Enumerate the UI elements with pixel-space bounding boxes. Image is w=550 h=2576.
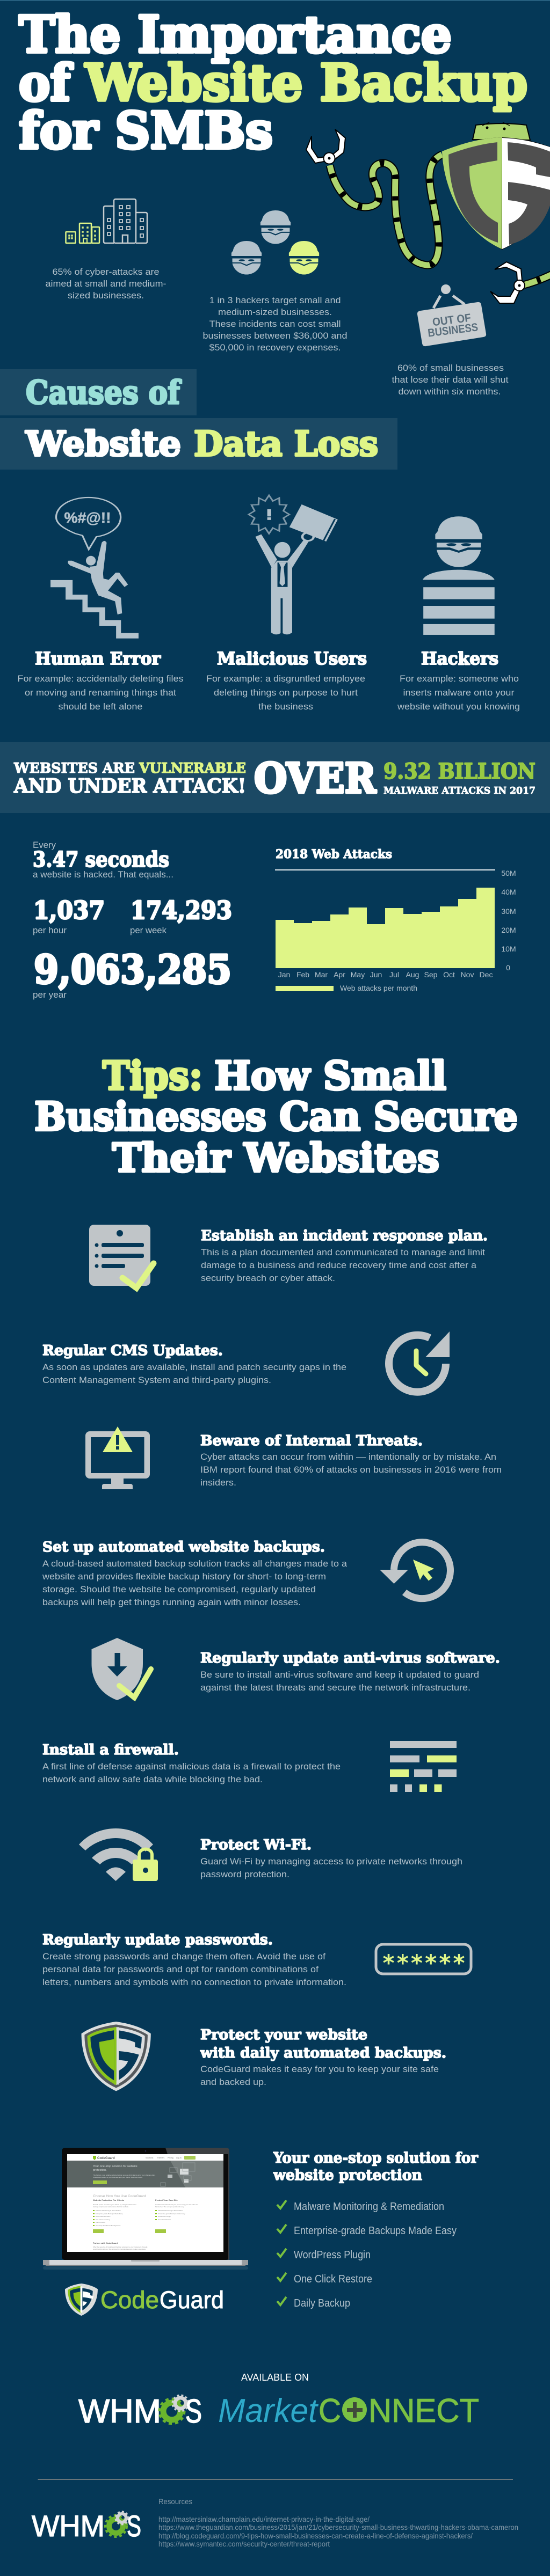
tip text: As soon as updates are available, install and patch security gaps in the <box>42 1362 346 1372</box>
x axis labels: Feb <box>296 970 309 979</box>
icon: out of business sign: OUT OF <box>432 312 472 328</box>
text: human error example: should be left alone <box>58 701 143 712</box>
tip: internal threats <box>85 1426 502 1489</box>
resources: http://blog.codeguard.com/9-tips-how-small-businesses-can-create-a-line-of-defense-against-hackers/ <box>158 2531 473 2540</box>
website hero: Your one-stop solution for website <box>93 2165 138 2168</box>
website hero: protection. <box>93 2169 107 2172</box>
tip heading: Install a firewall. <box>42 1742 179 1758</box>
tip text: letters, numbers and symbols with no connection to private information. <box>42 1977 346 1987</box>
text: 60 percent: that lose their data will shut <box>392 375 509 385</box>
icon: three hacker heads <box>231 210 319 275</box>
number: per year: 9,063,285 <box>34 947 231 993</box>
x axis labels: Sep <box>424 970 438 979</box>
logo: WHMCS <box>78 2393 202 2430</box>
tip text: This is a plan documented and communicated to manage and limit <box>201 1247 485 1257</box>
heading: human error: Human Error <box>35 648 161 669</box>
tip heading: Protect your website <box>200 2027 367 2043</box>
tip text: Content Management System and third-party plugins. <box>42 1375 271 1385</box>
text: every: Every <box>33 840 56 850</box>
tip text: against the latest threats and secure the network infrastructure. <box>200 1682 471 1693</box>
icon: shield with check <box>91 1638 151 1700</box>
panel: website data loss <box>0 418 397 470</box>
website navigation <box>93 2156 196 2160</box>
website content: a partnership with us. We remove the complexities and create a seamless <box>93 2248 146 2250</box>
website content: White-label Interface <box>96 2215 111 2218</box>
tip text: A cloud-based automated backup solution tracks all changes made to a <box>42 1558 348 1569</box>
stat: cyber-attacks on SMBs <box>45 199 167 301</box>
tip text: insiders. <box>200 1477 236 1488</box>
tip heading: Regularly update anti-virus software. <box>200 1650 500 1666</box>
website content: Client Access <box>96 2221 106 2223</box>
tip text: security breach or cyber attack. <box>201 1273 335 1283</box>
tip heading: Protect Wi-Fi. <box>200 1837 312 1853</box>
logo: CodeGuard <box>65 2284 224 2316</box>
icon: checklist document <box>89 1225 154 1288</box>
y axis labels: 50M <box>501 869 516 877</box>
y axis labels: 10M <box>501 945 516 953</box>
website content: Enterprise-grade Backups Made Easy <box>158 2213 185 2215</box>
robot lower claw and arm <box>490 262 550 303</box>
tip text <box>201 1247 485 1283</box>
tip heading <box>200 2027 446 2061</box>
text: websites are vulnerable: AND UNDER ATTACK! <box>13 775 246 797</box>
x axis labels: Jul <box>389 970 399 979</box>
icon: firewall bricks <box>390 1741 457 1792</box>
checklist items: One Click Restore <box>294 2273 372 2285</box>
panel: websites under attack banner <box>0 742 550 813</box>
website content: Provide peace of mind to your clients by using CodeGuard to <box>93 2204 136 2206</box>
panel: website data loss: Website <box>25 424 181 464</box>
bars <box>276 888 495 968</box>
x axis labels: Mar <box>315 970 328 979</box>
icon: man throwing briefcase <box>249 495 338 634</box>
website content: Website Protection For Clients <box>93 2199 125 2201</box>
text: speech bubble symbols: %#@!! <box>64 509 111 526</box>
website content: Choose How You Use CodeGuard <box>93 2194 146 2198</box>
icon: out of business sign: BUSINESS <box>427 321 479 340</box>
laptop base <box>43 2260 248 2270</box>
number: per week: per week <box>130 925 167 935</box>
logo wordmark: Code <box>100 2286 159 2314</box>
text: over: OVER <box>254 755 377 803</box>
tip text: damage to a business and reduce recovery time and cost after a <box>201 1260 477 1270</box>
checklist items: Daily Backup <box>294 2297 350 2309</box>
website content: Protect Your Own Site <box>155 2199 178 2201</box>
robot upper claw <box>306 129 345 164</box>
text: malicious users example: For example: a disgruntled employee <box>206 674 365 684</box>
text: that equals: a website is hacked. That equals... <box>33 869 173 880</box>
checklist items <box>277 2200 457 2309</box>
logo: MarketConnect: Market <box>218 2392 319 2429</box>
logo: WHMCS footer <box>32 2509 141 2543</box>
title <box>19 5 527 160</box>
website content: Offer the security of CodeGuard backup solutions to your customers through <box>93 2246 148 2248</box>
text: hackers example: website without you knowing <box>397 701 520 712</box>
tip text: CodeGuard makes it easy for you to keep your site safe <box>200 2064 439 2074</box>
website content <box>93 2194 198 2250</box>
logo: WHMCS: S <box>185 2393 202 2430</box>
title: of <box>19 54 73 113</box>
text: 1 in 3: These incidents can cost small <box>209 319 341 329</box>
text: hackers example <box>397 674 520 712</box>
heading: tips: How Small <box>214 1053 446 1099</box>
text: 9.32 billion malware attacks: MALWARE ATTACKS IN 2017 <box>383 785 535 796</box>
logo shield <box>65 2284 98 2316</box>
x axis labels: Dec <box>480 970 493 979</box>
tip text: website and provides flexible backup history for short- to long-term <box>42 1571 326 1582</box>
tip heading: Set up automated website backups. <box>42 1539 325 1555</box>
logo wordmark: Guard <box>160 2286 224 2314</box>
x axis labels: Nov <box>461 970 474 979</box>
heading: hackers: Hackers <box>421 648 498 669</box>
checklist heading: website protection <box>273 2167 422 2184</box>
text: human error example: For example: accidentally deleting files <box>17 674 184 684</box>
icon: out of business sign <box>417 284 486 346</box>
icon: falling person with speech bubble <box>50 497 139 639</box>
tip text <box>200 1856 462 1879</box>
icon: CodeGuard robot mascot <box>306 122 550 303</box>
tip text: password protection. <box>200 1869 290 1879</box>
number: per hour <box>33 896 105 935</box>
icon: clock with refresh arrow <box>389 1331 450 1392</box>
tip text <box>42 1558 348 1607</box>
text: available on: AVAILABLE ON <box>241 2372 309 2383</box>
number: per week <box>130 896 232 935</box>
resources: Resources <box>158 2497 192 2506</box>
tip text: IBM report found that 60% of attacks on businesses in 2016 were from <box>200 1465 502 1475</box>
tip: anti-virus software <box>91 1638 500 1700</box>
logo: WHMCS: WHM <box>78 2393 161 2430</box>
checklist items: WordPress Plugin <box>294 2249 371 2261</box>
tip: update passwords <box>42 1932 471 1987</box>
tip text <box>200 1452 502 1488</box>
text: 9.32 billion malware attacks <box>383 759 535 796</box>
panel: causes of: Causes of <box>26 374 182 412</box>
text: 60 percent: down within six months. <box>399 386 501 397</box>
text: 65 percent <box>45 267 167 301</box>
logo wordmark <box>100 2286 224 2314</box>
tip text: network and allow safe data while blocking the bad. <box>42 1774 263 1784</box>
website content: One Click Restore <box>158 2219 171 2221</box>
cause: hackers <box>397 516 520 712</box>
tip text: Cyber attacks can occur from within — intentionally or by mistake. An <box>200 1452 496 1462</box>
title: Website Backup <box>85 54 527 113</box>
x axis labels: Apr <box>334 970 345 979</box>
website content: backed up. The set up is quick and easy. <box>155 2206 184 2208</box>
x axis labels: Jan <box>278 970 290 979</box>
text: 1 in 3 <box>203 295 347 353</box>
website content: Enterprise-grade Backups Made Easy <box>96 2213 123 2215</box>
legend <box>276 984 417 992</box>
panel: website data loss: Data Loss <box>194 424 378 464</box>
legend: Web attacks per month <box>340 984 417 992</box>
text: 65 percent: 65% of cyber-attacks are <box>53 267 159 277</box>
tip: incident response plan <box>89 1225 488 1288</box>
tip heading: with daily automated backups. <box>200 2045 446 2061</box>
website navigation: Pricing <box>168 2157 173 2159</box>
tip text <box>42 1761 341 1784</box>
heading: tips: Businesses Can Secure <box>34 1094 518 1140</box>
text: 9.32 billion malware attacks: 9.32 BILLION <box>383 759 535 784</box>
heading: tips: Their Websites <box>112 1135 439 1181</box>
tip heading: Beware of Internal Threats. <box>200 1433 423 1449</box>
text: malicious users example <box>206 674 365 712</box>
website content: You-brand Invoicing <box>96 2219 110 2221</box>
y axis labels: 20M <box>501 926 516 934</box>
logo: MarketConnect <box>218 2392 479 2429</box>
y axis labels <box>501 869 516 972</box>
website hero: CodeGuard scales to your business and your clients' business needs. <box>93 2176 143 2178</box>
logo: WHMCS footer: WHM <box>32 2509 105 2543</box>
website navigation: Log In <box>176 2157 182 2159</box>
number: per hour: 1,037 <box>33 896 105 925</box>
tip: daily automated backups <box>81 2022 446 2091</box>
tip text: personal data for passwords and opt for random combinations of <box>42 1964 319 1974</box>
x axis labels: Oct <box>443 970 455 979</box>
icon: password field: ****** <box>382 1950 465 1976</box>
website content: One-stop WordPress Management <box>96 2224 120 2227</box>
icon: monitor with warning <box>85 1426 150 1489</box>
text: malicious users example: the business <box>258 701 313 712</box>
cause: human error <box>17 497 184 712</box>
x axis labels: Jun <box>370 970 382 979</box>
text: malicious users example: deleting things on purpose to hurt <box>214 687 358 698</box>
cause: malicious users <box>206 495 367 712</box>
checklist heading <box>273 2150 479 2184</box>
checklist items: Enterprise-grade Backups Made Easy <box>294 2225 457 2237</box>
tip text <box>200 2064 439 2087</box>
text: 1 in 3: 1 in 3 hackers target small and <box>209 295 341 305</box>
icon: backup cycle with cursor <box>380 1542 450 1599</box>
text: 65 percent: sized businesses. <box>68 290 144 301</box>
website content: WordPress Plugin <box>158 2215 171 2218</box>
number: 3.47 seconds: 3.47 seconds <box>33 847 169 872</box>
text: 1 in 3: medium-sized businesses. <box>218 307 332 317</box>
tip text <box>42 1951 346 1987</box>
tip text: Be sure to install anti-virus software and keep it updated to guard <box>200 1670 479 1680</box>
text: human error example: or moving and renaming things that <box>25 687 176 698</box>
heading: malicious users: Malicious Users <box>217 648 367 669</box>
y axis labels: 30M <box>501 907 516 916</box>
text: 65 percent: aimed at small and medium- <box>45 279 167 289</box>
text: 60 percent <box>392 363 509 397</box>
tip text: Create strong passwords and change them often. Avoid the use of <box>42 1951 325 1962</box>
title: for SMBs <box>19 101 273 160</box>
website navigation: Solutions <box>146 2157 154 2159</box>
heading: causes of website data loss <box>0 369 397 470</box>
robot shield body <box>442 137 550 250</box>
heading: tips <box>34 1053 518 1181</box>
checklist heading: Your one-stop solution for <box>273 2150 479 2167</box>
text: hackers example: For example: someone who <box>400 674 519 684</box>
tip text: backups will help get things running again with minor losses. <box>42 1597 301 1607</box>
resources: https://www.theguardian.com/business/2015/jan/21/cybersecurity-small-business-thwarting-hackers-obama-cameron <box>158 2523 518 2531</box>
tip text: A first line of defense against malicious data is a firewall to protect the <box>42 1761 341 1772</box>
number: per year: per year <box>33 990 67 1000</box>
chart: 2018 web attacks <box>275 847 516 992</box>
website content: CodeGuard makes it easy for you to keep your site safe and <box>155 2204 198 2206</box>
tip: protect wi-fi <box>79 1828 462 1881</box>
text: hackers example: inserts malware onto your <box>403 687 515 698</box>
checklist items: Malware Monitoring & Remediation <box>294 2201 444 2213</box>
tip text: storage. Should the website be compromised, regularly updated <box>42 1584 316 1594</box>
text: 1 in 3: $50,000 in recovery expenses. <box>209 342 341 353</box>
website content: Partner with CodeGuard <box>93 2242 118 2244</box>
panel: causes of <box>0 369 197 415</box>
number: per week: 174,293 <box>131 896 232 925</box>
logo: WHMCS footer: S <box>127 2509 141 2543</box>
tip text: and backed up. <box>200 2077 266 2087</box>
tip: regular CMS updates <box>42 1331 450 1392</box>
resources: https://www.symantec.com/security-center/threat-report <box>158 2540 330 2548</box>
number: per hour: per hour <box>33 925 67 935</box>
text: 60 percent: 60% of small businesses <box>397 363 504 373</box>
robot left arm <box>330 155 442 265</box>
logo: MarketConnect: C <box>319 2392 341 2429</box>
robot head <box>473 122 530 140</box>
logo: MarketConnect: NNECT <box>368 2392 479 2429</box>
icon: CodeGuard shield <box>81 2022 151 2091</box>
title: The Importance <box>19 5 452 64</box>
website hero: The fastest, most reliable website backup service which tracks all of your changes daily. <box>93 2174 155 2176</box>
resources: http://mastersinlaw.champlain.edu/internet-privacy-in-the-digital-age/ <box>158 2515 370 2523</box>
tip heading: Establish an incident response plan. <box>201 1228 488 1244</box>
tip text <box>42 1362 346 1385</box>
stats: hacking frequency <box>33 840 232 1000</box>
heading: tips: Tips: <box>103 1053 202 1099</box>
tip: automated website backups <box>42 1539 450 1607</box>
x axis labels <box>278 970 493 979</box>
one-stop solution checklist <box>273 2150 479 2309</box>
tip heading: Regular CMS Updates. <box>42 1343 223 1359</box>
icon: hacker in striped shirt <box>423 516 495 635</box>
x axis labels: May <box>351 970 365 979</box>
website navigation: CodeGuard <box>97 2157 115 2160</box>
tip text <box>200 1670 479 1693</box>
stat: 1 in 3 hackers <box>203 210 347 353</box>
website content: backup and provide maintenance for their website. <box>93 2206 129 2208</box>
y axis labels: 40M <box>501 888 516 896</box>
website navigation: Partners <box>157 2157 164 2159</box>
text: 1 in 3: businesses between $36,000 and <box>203 331 347 341</box>
stat: 60 percent out of business <box>392 284 509 397</box>
tip heading: Regularly update passwords. <box>42 1932 273 1948</box>
text: websites are vulnerable: VULNERABLE <box>139 760 246 777</box>
tip text: Guard Wi-Fi by managing access to private networks through <box>200 1856 462 1867</box>
chart title: 2018 Web Attacks <box>276 847 392 861</box>
website hero <box>67 2161 223 2187</box>
icon: wi-fi with padlock <box>79 1828 158 1881</box>
laptop with CodeGuard website <box>43 2148 248 2270</box>
text: websites are vulnerable: WEBSITES ARE <box>13 760 135 777</box>
resources <box>158 2497 518 2548</box>
website content: Malware Monitoring & Remediation <box>158 2209 183 2212</box>
icon: buildings <box>66 199 147 243</box>
text: websites are vulnerable <box>13 760 246 797</box>
website content: Malware Monitoring & Remediation <box>96 2209 121 2212</box>
text: human error example <box>17 674 184 712</box>
y axis labels: 0 <box>506 963 510 972</box>
tip: firewall <box>42 1741 457 1792</box>
x axis labels: Aug <box>406 970 419 979</box>
